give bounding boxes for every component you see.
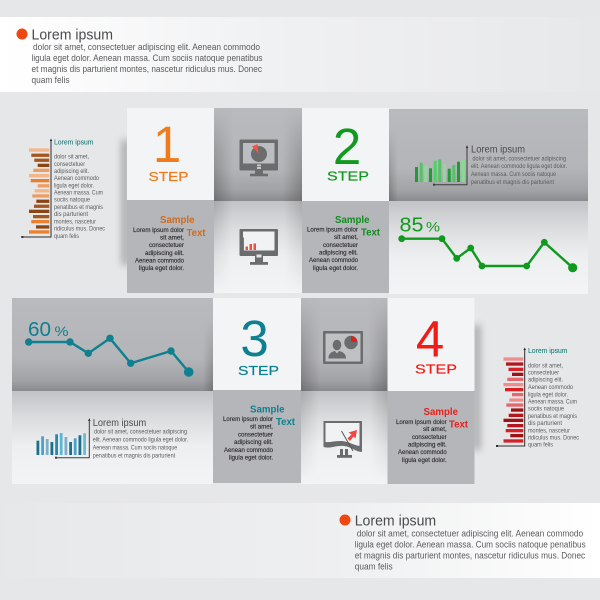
text block: blue chart: elit. Aenean commodo ligula eget dolor. [93, 437, 188, 444]
step 1 body: Aenean commodo [135, 258, 184, 264]
heading: left chart: Lorem ipsum [54, 138, 94, 146]
bar chart: blue [36, 418, 91, 459]
step 1 body: sit amet, [160, 234, 184, 242]
text block: left chart: Aenean commodo [54, 175, 99, 182]
step 3 body: ligula eget dolor. [229, 454, 273, 462]
icon: presentation tablet [323, 331, 363, 364]
text block: right chart: sociis natoque [528, 406, 564, 413]
step 2 body: adipiscing elit. [319, 250, 358, 256]
icon: monitor with bar chart [240, 229, 278, 265]
step 4 body: Aenean commodo [398, 449, 447, 456]
text block: right chart: dolor sit amet, [528, 363, 563, 370]
icon: red dot bottom [340, 514, 350, 526]
text block: left chart: dis parturient [54, 211, 88, 218]
step 2 body: ligula eget dolor. [313, 265, 358, 272]
icon: monitor with pie chart [240, 140, 278, 176]
icon: red dot [16, 28, 28, 40]
text block: right chart: consectetuer [528, 370, 560, 377]
step label: STEP [415, 362, 457, 376]
text block: bottom: et magnis dis parturient montes, nascetur ridiculus mus. Donec [355, 550, 586, 560]
bar chart: red [496, 348, 526, 447]
step 3 body: consectetuer [238, 432, 274, 438]
sample text heading: Sample [335, 215, 370, 226]
text block: right chart: ligula eget dolor. [528, 391, 568, 398]
sample text heading [250, 404, 296, 428]
text block: left chart: montes, nascetur [54, 218, 97, 226]
sample text heading: Sample [424, 407, 458, 418]
text block: blue chart [93, 429, 188, 460]
step 4 body: sit amet, [423, 426, 447, 433]
panel: blue charts [12, 298, 213, 484]
number 3: 3 [240, 310, 269, 367]
panel: top intro band [0, 17, 600, 92]
step 1 body: adipiscing elit. [145, 250, 184, 257]
line chart: 85 percent: % [426, 219, 440, 235]
line chart: 85 percent [398, 215, 577, 272]
text block: right chart: Aenean commodo [528, 384, 573, 391]
text block: left chart: ridiculus mus. Donec [54, 226, 106, 232]
text block: bottom: dolor sit amet, consectetuer adipiscing elit. Aenean commodo [357, 529, 583, 539]
text block: bottom [355, 529, 586, 572]
heading: top: Lorem ipsum [32, 26, 113, 44]
step 4 body [396, 419, 447, 464]
text block: blue chart: dolor sit amet, consectetuer adipiscing [94, 429, 187, 436]
step 2 body: consectetuer [323, 242, 359, 249]
step 4 body: ligula eget dolor. [402, 457, 447, 464]
text block: blue chart: penatibus et magnis dis parturient [93, 452, 175, 460]
text block: right chart: montes, nascetur [528, 427, 571, 434]
text block: right chart: dis parturient [528, 420, 562, 427]
number 2: 2 [333, 118, 361, 175]
panel: bottom summary band [4, 503, 600, 578]
panel: step 1 [127, 108, 214, 293]
step label: STEP [148, 169, 188, 184]
step 4 body: adipiscing elit. [408, 442, 447, 448]
panel: right red side chart [496, 346, 580, 449]
panel: step 4 [388, 298, 474, 484]
text block: left chart: sociis natoque [54, 196, 90, 204]
sample text heading: Sample [160, 215, 195, 226]
text block: left chart: adipiscing elit. [54, 168, 89, 175]
step 2 body: Aenean commodo [309, 257, 358, 264]
text block: top: dolor sit amet, consectetuer adipiscing elit. Aenean commodo [33, 42, 260, 52]
text block: green chart: penatibus et magnis dis parturient [471, 179, 554, 186]
text block: blue chart: Aenean massa. Cum sociis natoque [93, 444, 178, 452]
heading: right chart: Lorem ipsum [528, 346, 568, 355]
step 3 body: sit amet, [250, 424, 273, 430]
step 1 body: ligula eget dolor. [139, 265, 184, 272]
text block: right chart: adipiscing elit. [528, 377, 563, 384]
heading: blue chart: Lorem ipsum [93, 417, 146, 429]
panel: left orange side chart [21, 138, 106, 240]
step 3 body: adipiscing elit. [234, 439, 273, 446]
step label: STEP [238, 363, 279, 378]
text block: green chart: dolor sit amet, consectetuer adipiscing [472, 156, 566, 162]
text block: green chart: elit. Aenean commodo ligula eget dolor. [471, 163, 567, 170]
sample text heading [335, 215, 381, 238]
icon: curved monitor with arrow [324, 421, 362, 458]
text block: left chart: dolor sit amet, [54, 154, 89, 160]
step 4 body: consectetuer [412, 434, 447, 441]
text block: left chart: consectetuer [54, 161, 86, 168]
sample text heading: Text [186, 228, 206, 239]
sample text heading [424, 407, 469, 430]
line chart: 85 percent: 85 [400, 215, 424, 237]
text block: top [32, 42, 263, 85]
heading: green chart: Lorem ipsum [471, 144, 525, 156]
sample text heading: Sample [250, 404, 285, 416]
panel: icon column row 2 [301, 298, 388, 484]
step label: STEP [327, 168, 369, 184]
text block: bottom: quam felis [355, 562, 393, 572]
text block: left chart [54, 154, 106, 240]
text block: right chart: quam felis [528, 442, 554, 449]
step 2 body: Lorem ipsum dolor [307, 226, 359, 234]
step 3 body: Aenean commodo [224, 447, 273, 454]
step 2 body: sit amet, [334, 234, 358, 241]
text block: left chart: penatibus et magnis [54, 204, 104, 211]
text block: top: quam felis [32, 75, 70, 85]
text block: left chart: Aenean massa. Cum [54, 190, 103, 196]
text block: right chart: Aenean massa. Cum [528, 399, 577, 406]
line chart: 60 percent [25, 319, 194, 377]
text block: right chart: ridiculus mus. Donec [528, 435, 580, 442]
step 1 body [133, 227, 185, 272]
step 3 body [223, 416, 274, 462]
heading: bottom: Lorem ipsum [355, 513, 436, 530]
sample text heading: Text [449, 420, 469, 430]
bar chart: orange [21, 138, 52, 238]
number 4: 4 [416, 311, 444, 368]
panel: icon column row 1 [214, 108, 302, 293]
step 2 body [307, 226, 359, 272]
text block: right chart: penatibus et magnis [528, 413, 578, 420]
step 1 body: Lorem ipsum dolor [133, 227, 185, 234]
line chart: 60 percent: 60 [28, 319, 51, 341]
step 3 body: Lorem ipsum dolor [223, 416, 274, 423]
soft shadows beside steps [122, 140, 129, 265]
panel: step 2 [302, 108, 389, 293]
sample text heading: Text [276, 417, 296, 428]
panel: green charts [389, 109, 588, 294]
text block: top: et magnis dis parturient montes, nascetur ridiculus mus. Donec [32, 64, 262, 74]
text block: right chart [528, 363, 580, 449]
line chart: 60 percent: % [54, 323, 68, 339]
text block: green chart: Aenean massa. Cum sociis natoque [471, 171, 556, 178]
text block: top: ligula eget dolor. Aenean massa. Cum sociis natoque penatibus [32, 53, 263, 63]
text block: left chart: quam felis [54, 233, 80, 240]
bar chart: green [415, 145, 468, 186]
panel: step 3 [213, 298, 301, 483]
sample text heading [160, 215, 206, 239]
sample text heading: Text [361, 228, 381, 238]
step 1 body: consectetuer [149, 242, 185, 249]
text block: green chart [471, 156, 567, 186]
number 1: 1 [153, 116, 181, 173]
text block: left chart: ligula eget dolor. [54, 182, 94, 190]
step 4 body: Lorem ipsum dolor [396, 419, 447, 426]
